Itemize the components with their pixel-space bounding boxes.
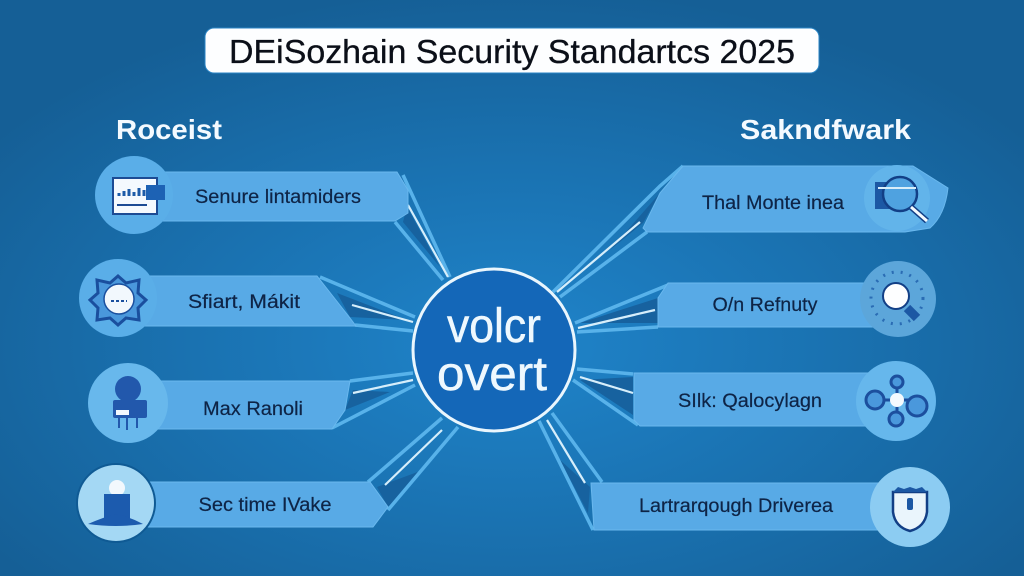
panel: right item 4 (591, 467, 950, 547)
panel: left item 4: Sec time IVake (198, 495, 332, 516)
panel: right item 1: Thal Monte inea (702, 193, 844, 214)
panel: right item 3 (634, 361, 936, 441)
heading: right column: Sakndfwark (740, 114, 911, 145)
icon: dashboard (113, 178, 165, 214)
title: DEiSozhain Security Standartcs 2025 (229, 33, 795, 70)
panel: left item 1 (95, 156, 408, 234)
icon: magnifier on camera (875, 177, 927, 221)
panel: right item 3: SIlk: Qalocylagn (678, 391, 822, 412)
icon: network nodes (866, 376, 927, 426)
panel: left item 1: Senure lintamiders (195, 187, 361, 208)
panel: right item 4: Lartrarqough Driverea (639, 496, 833, 517)
panel: right item 1 (643, 165, 948, 232)
panel: right item 2: O/n Refnuty (712, 295, 818, 316)
panel: left item 3: Max Ranoli (203, 399, 303, 420)
icon: magnifier with dots (871, 272, 923, 324)
icon: shield (893, 487, 927, 531)
icon: robot (113, 376, 147, 430)
connector rays (320, 166, 683, 530)
center circle: volcr (447, 300, 541, 353)
heading: left column: Roceist (116, 114, 222, 145)
panel: left item 3 (88, 363, 350, 443)
center circle: overt (437, 348, 547, 401)
icon: lock figure (88, 480, 143, 526)
panel: right item 2 (658, 261, 936, 337)
panel: left item 4 (76, 463, 388, 543)
icon: star badge (90, 276, 146, 325)
panel: left item 2 (79, 259, 356, 337)
panel: left item 2: Sfiart, Mákit (188, 292, 301, 313)
center circle (413, 269, 575, 431)
